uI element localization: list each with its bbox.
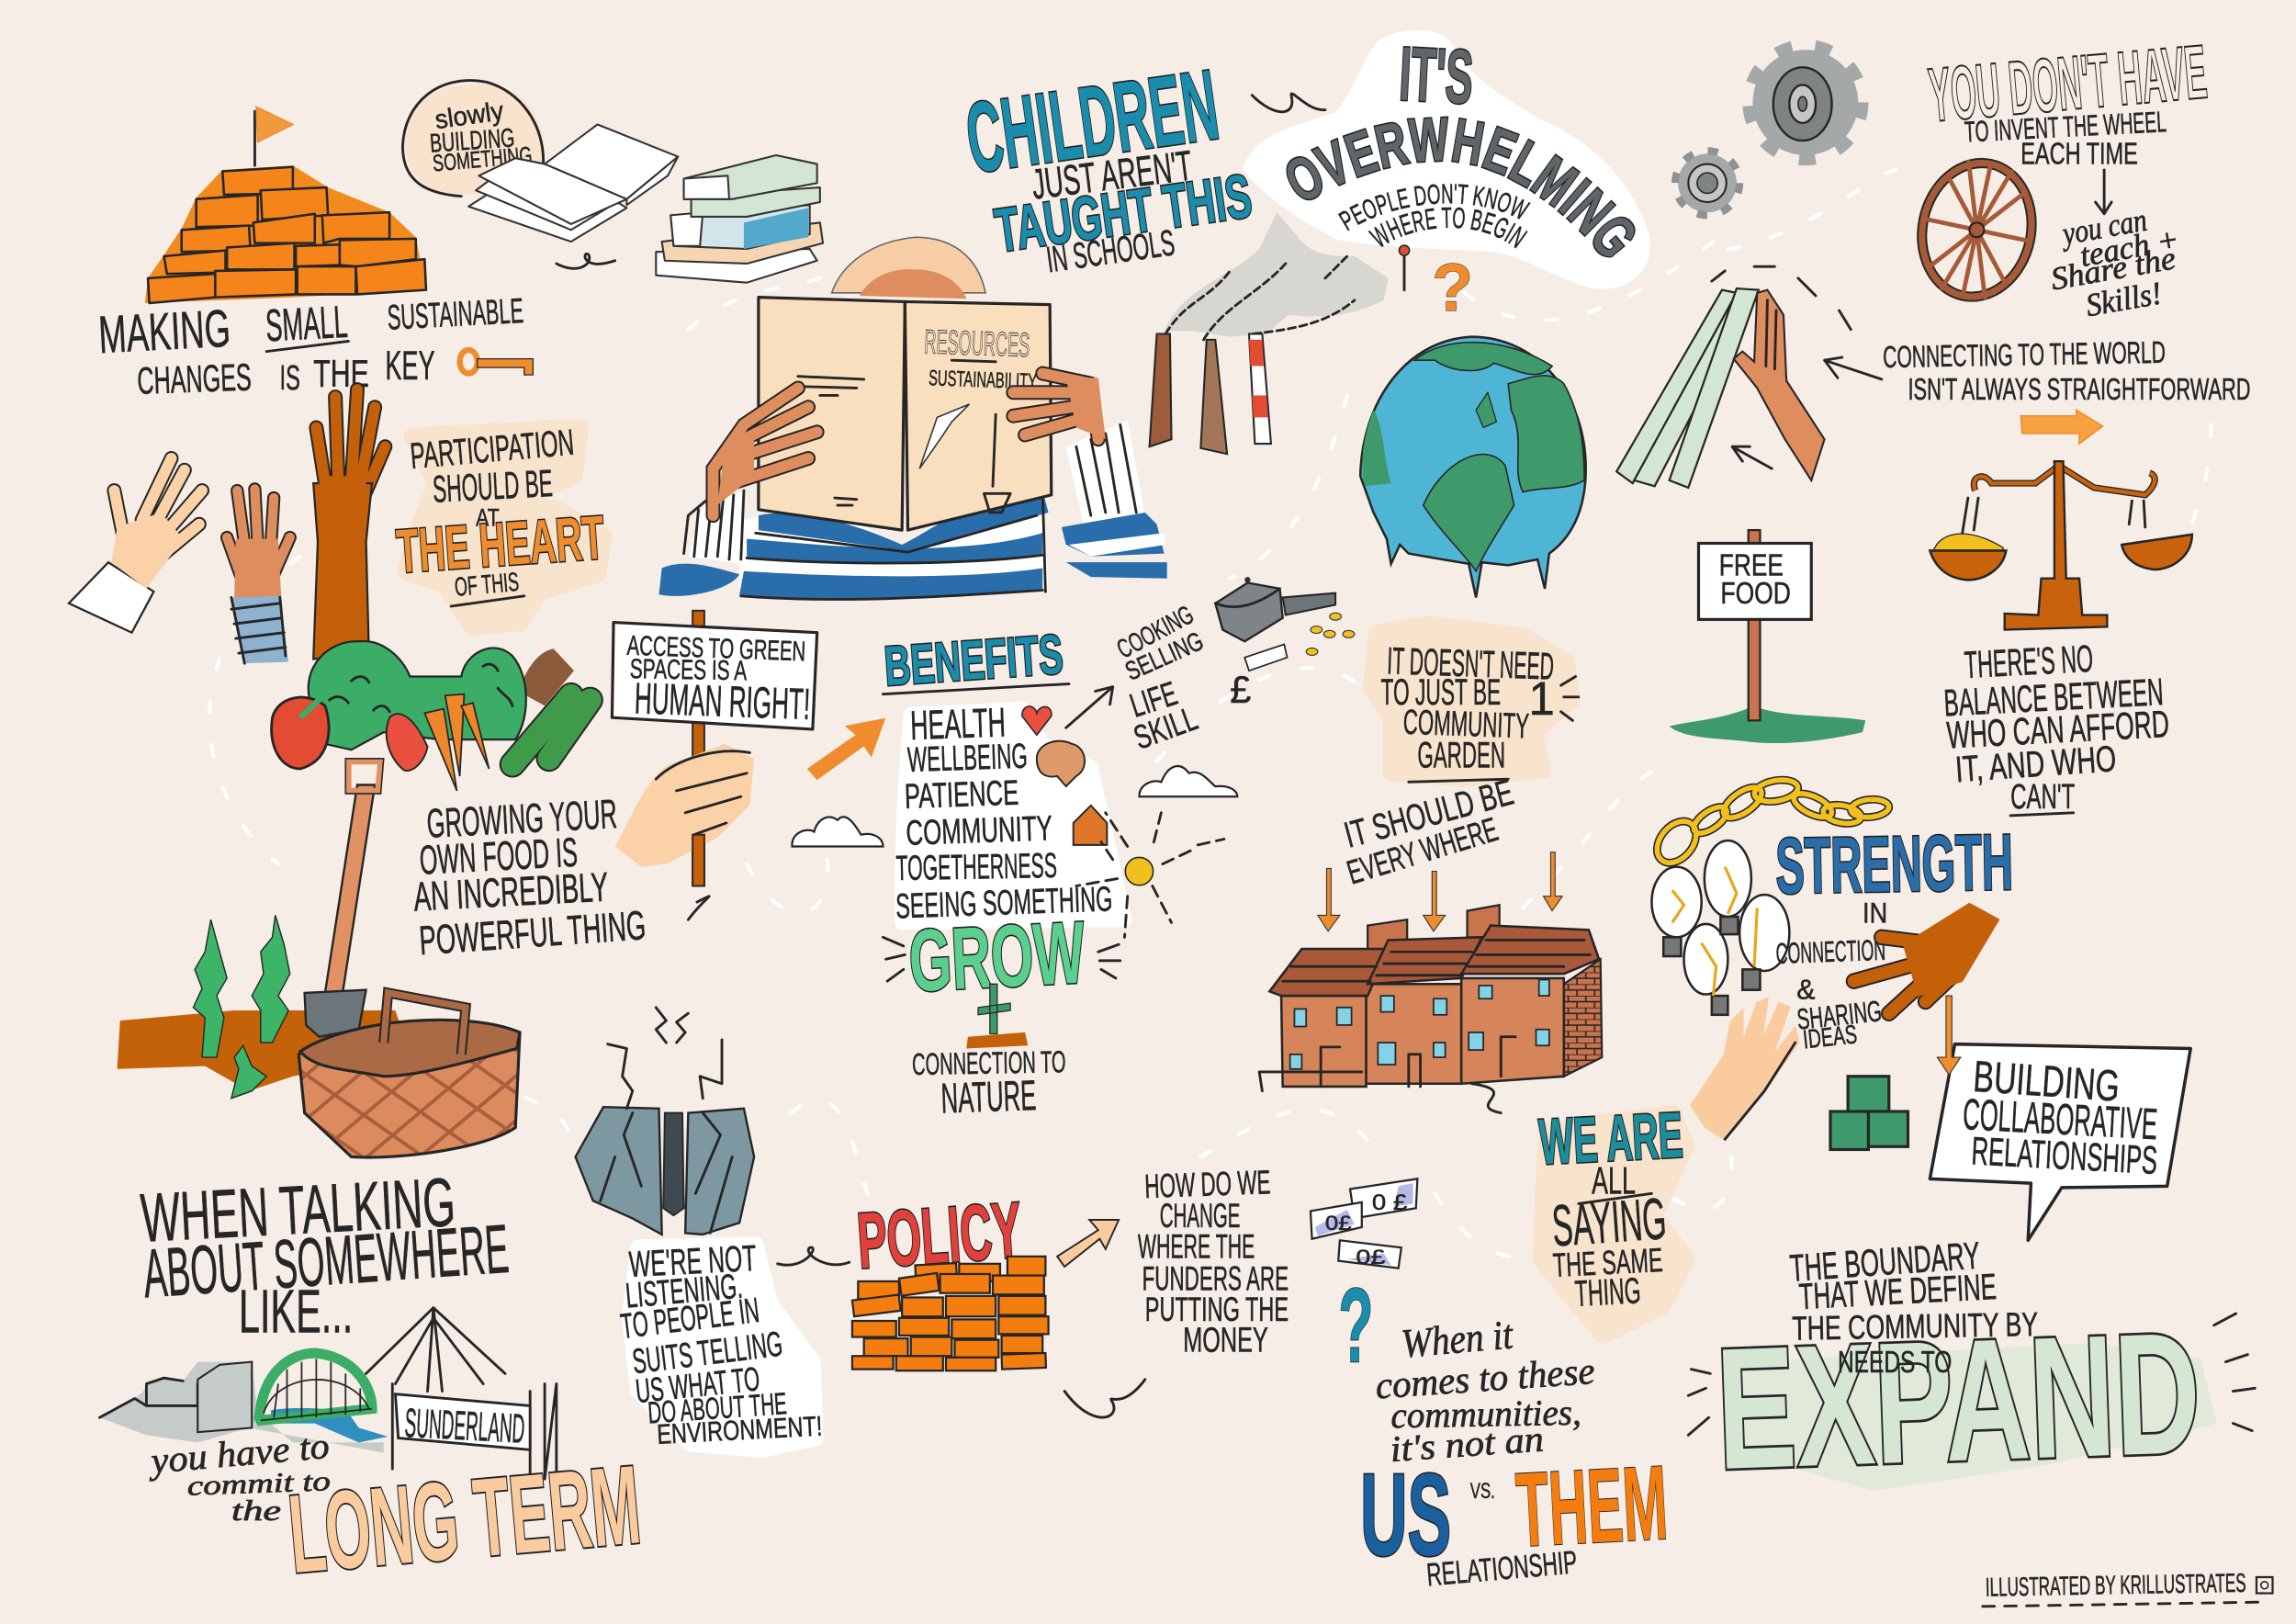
left sleeve	[658, 491, 744, 596]
text: you have to commit to the long term: the	[231, 1494, 281, 1527]
illustration: pile of vegetables	[272, 641, 591, 791]
text: how do we change where the funders: HOW DO WE	[1144, 1163, 1271, 1205]
text: making small sustainable changes is the key: KEY	[385, 344, 435, 389]
text: we are all saying the same thing: WE ARE	[1537, 1099, 1684, 1178]
text: strength in connection and sharing ideas: CONNECTION	[1775, 933, 1886, 970]
icon: brown reaching hand	[1853, 904, 1998, 1013]
right hand	[1013, 374, 1106, 439]
icon: peach reaching hand	[1692, 998, 1798, 1139]
leaf details	[330, 664, 512, 712]
text: the boundary that we define: THE BOUNDARY	[1788, 1234, 1981, 1290]
text: cooking selling life skill	[1112, 600, 1208, 757]
text: when it comes to these communities: communities,	[1390, 1392, 1581, 1436]
squiggle	[778, 1247, 850, 1265]
sign: access to green spaces is a human right: ACCESS TO GREEN	[626, 631, 806, 667]
text: benefits list: TOGETHERNESS	[895, 846, 1057, 888]
text: there's no balance between	[1942, 637, 2170, 817]
text: we are all saying the same thing: SAYING	[1550, 1185, 1669, 1259]
text: we are all saying the same thing	[1537, 1099, 1687, 1336]
text: growing your own food: OWN FOOD IS	[419, 830, 579, 884]
text: growing your own food: AN INCREDIBLY	[412, 865, 609, 920]
heading: when talking about somewhere like: ABOUT SOMEWHERE	[141, 1210, 512, 1312]
text: we are all saying the same thing: THE SAME	[1552, 1241, 1663, 1284]
text: you don't have to invent the wheel: EACH TIME	[2020, 138, 2138, 172]
text: connecting to the world	[1825, 336, 2251, 407]
squiggle	[688, 897, 709, 919]
icon: stack of books	[656, 155, 823, 283]
text: when it comes to these communities: it's not an	[1389, 1417, 1545, 1470]
icon: bank notes: 0£	[1356, 1246, 1386, 1269]
text: there's no balance between: WHO CAN AFFORD	[1946, 702, 2170, 757]
text: children just aren't taught this in schools	[960, 49, 1255, 280]
speech bubble: slowly building something: SOMETHING	[432, 142, 533, 177]
text: grow with plant and connection to nature: GROW	[906, 903, 1087, 1010]
callout: it's overwhelming: WHERE TO BEGIN	[1368, 208, 1528, 248]
icon: light bulbs	[1651, 840, 1789, 1015]
text: participation should be at the heart of this: SHOULD BE	[432, 461, 554, 511]
text: we're not listening to people in suits: WE'RE NOT	[628, 1238, 758, 1285]
striped jumper	[739, 491, 1049, 601]
text: strength in connection and sharing ideas	[1775, 818, 2014, 1054]
icon: small gear	[1675, 151, 1739, 215]
text: growing your own food: POWERFUL THING	[418, 903, 647, 964]
icon: suit jacket	[576, 1008, 754, 1235]
illustration: melting globe	[1360, 337, 1586, 597]
text: the boundary that we define: THE COMMUNITY BY	[1792, 1305, 2038, 1348]
text: children just aren't taught this in schools: TAUGHT THIS	[991, 162, 1255, 265]
text: benefits list: WELLBEING	[906, 737, 1028, 780]
text: participation should be at the heart of this: THE HEART	[394, 503, 607, 586]
text: you can teach and share the skills: teach +	[2077, 221, 2181, 274]
text: you have to commit to the long term	[145, 1425, 645, 1596]
arrow: benefits to life skill	[1066, 687, 1113, 727]
text: we are all saying the same thing: ALL	[1592, 1158, 1636, 1201]
text: us vs them relationship: VS.	[1470, 1479, 1495, 1504]
text: cooking selling life skill: SKILL	[1129, 699, 1202, 757]
illustration: soil with plants	[118, 915, 410, 1099]
text: how do we change where the funders: MONEY	[1183, 1320, 1268, 1359]
pepper stalk	[300, 691, 328, 717]
text: it doesn't need to just be 1 community garden: TO JUST BE	[1381, 672, 1501, 713]
left hand	[713, 388, 817, 515]
text: you can teach and share the skills: Share the	[2048, 240, 2178, 298]
cucumbers	[512, 695, 591, 764]
text: we're not listening to people in suits: SUITS TELLING	[630, 1325, 784, 1382]
text: benefits list: HEALTH	[909, 700, 1007, 749]
icon: coins, note and pound sign	[1230, 613, 1355, 711]
sign: free food: FREE	[1719, 549, 1784, 583]
icon: gold chain	[1649, 777, 1890, 870]
icon: house	[1074, 806, 1107, 845]
text: making small sustainable changes is the key: CHANGES	[137, 355, 252, 402]
squiggle	[557, 254, 615, 268]
text: making small sustainable changes is the key: MAKING	[97, 299, 231, 365]
text: we're not listening to people in suits: US WHAT TO	[634, 1359, 761, 1410]
text: making small sustainable changes is the key: SMALL	[264, 297, 349, 351]
icon: hand holding sign post	[615, 744, 754, 886]
text: we are all saying the same thing: THING	[1574, 1270, 1642, 1314]
speech bubble: slowly building something: slowly	[433, 96, 506, 135]
sign: free food: FOOD	[1720, 577, 1791, 611]
text: you can teach and share the skills	[2048, 202, 2181, 323]
illustration: sunderland skyline and bridge: SUNDERLAND	[404, 1401, 526, 1452]
text: us vs them relationship	[1360, 1444, 1671, 1594]
text: how do we change where the funders	[1138, 1163, 1289, 1359]
arrow: orange down to bubble	[1937, 996, 1961, 1075]
text: cooking selling life skill: LIFE	[1125, 674, 1182, 725]
illustration: factory chimneys with smoke	[1150, 212, 1388, 454]
text: making small sustainable changes is the key	[97, 291, 524, 402]
text: you can teach and share the skills: Skills!	[2083, 275, 2165, 323]
icon: bank notes: 0 £	[1372, 1190, 1407, 1215]
icon: spade	[305, 759, 384, 1037]
text: participation should be at the heart of this	[394, 423, 607, 626]
text: benefits list: PATIENCE	[904, 773, 1019, 817]
text: there's no balance between: THERE'S NO	[1964, 637, 2094, 686]
text: it doesn't need to just be 1 community garden: GARDEN	[1417, 735, 1505, 775]
icon: bank notes	[1311, 1179, 1417, 1269]
icon: grow sun and rays	[1076, 813, 1224, 937]
small red pepper	[387, 714, 428, 771]
text: us vs them relationship: US	[1360, 1450, 1451, 1581]
text: how do we change where the funders: FUNDERS ARE	[1142, 1260, 1289, 1298]
text: you don't have to invent the wheel: TO INVENT THE WHEEL	[1964, 105, 2167, 149]
text: strength in connection and sharing ideas: STRENGTH	[1775, 818, 2014, 910]
icon: tall brown tree-arm hand	[313, 389, 385, 659]
icon: open white book	[468, 125, 678, 242]
callout: it's overwhelming: OVERWHELMING	[1286, 116, 1636, 257]
text: it doesn't need to just be 1 community garden: COMMUNITY	[1402, 703, 1530, 746]
text: strength in connection and sharing ideas: IDEAS	[1802, 1020, 1859, 1054]
text: we're not listening to people in suits	[618, 1238, 823, 1450]
right sleeve	[1062, 421, 1167, 579]
text: we're not listening to people in suits: DO ABOUT THE	[647, 1387, 788, 1431]
text: strength in connection and sharing ideas: SHARING	[1795, 994, 1884, 1036]
sign: access to green spaces is a human right	[612, 611, 817, 886]
icon: brain	[1037, 741, 1085, 786]
heading: when talking about somewhere like	[139, 1163, 512, 1347]
text: the boundary that we define	[1788, 1234, 2038, 1380]
text: you have to commit to the long term: you have to	[145, 1425, 331, 1482]
illustration: terraced houses	[1259, 905, 1602, 1113]
text: children just aren't taught this in schools: IN SCHOOLS	[1044, 222, 1177, 280]
text: us vs them relationship: RELATIONSHIP	[1425, 1544, 1579, 1594]
text: you have to commit to the long term: commit to	[186, 1465, 331, 1502]
text: making small sustainable changes is the key: THE	[313, 352, 369, 395]
text: how do we change where the funders: WHERE THE	[1138, 1227, 1255, 1265]
figure: person reading resources book	[658, 237, 1167, 601]
text: you can teach and share the skills: you can	[2057, 202, 2150, 253]
carrots	[424, 694, 490, 791]
icon: large gear	[1750, 47, 1861, 158]
arrow: orange	[808, 719, 884, 779]
text: you have to commit to the long term: LONG TERM	[284, 1441, 645, 1596]
text: making small sustainable changes is the key: IS	[280, 358, 300, 398]
icon: heart	[1022, 706, 1052, 735]
icon: teal question mark: ?	[1338, 1268, 1374, 1385]
text: participation should be at the heart of this: OF THIS	[454, 568, 520, 603]
icon: hand touching green books	[1616, 266, 1851, 488]
icon: raised white-sleeved hand	[69, 458, 202, 633]
icon: saucepan	[1215, 577, 1335, 641]
arrows: down to houses	[1318, 852, 1562, 931]
icon: coins, note and pound sign: £	[1230, 668, 1251, 711]
text: it should be everywhere	[1340, 773, 1517, 892]
text: the boundary that we define: THAT WE DEFINE	[1798, 1267, 1998, 1317]
open book	[759, 298, 1052, 530]
sign: free food	[1670, 530, 1865, 743]
text: growing your own food: GROWING YOUR	[426, 792, 618, 847]
callout: it's overwhelming: IT'S	[1398, 31, 1475, 120]
text: the boundary that we define: NEEDS TO	[1838, 1346, 1952, 1380]
text: strength in connection and sharing ideas: &	[1796, 975, 1816, 1005]
text: strength in connection and sharing ideas: IN	[1863, 896, 1887, 929]
text: it doesn't need to just be 1 community garden: 1	[1529, 672, 1555, 725]
text: cooking selling life skill: SELLING	[1121, 626, 1208, 687]
callout: it's overwhelming	[1244, 29, 1650, 289]
text: how do we change where the funders: CHANGE	[1160, 1197, 1240, 1235]
speech bubble: slowly building something	[402, 81, 545, 197]
illustration: policy brick wall	[852, 1186, 1049, 1370]
callout: building collaborative relationships	[1930, 1044, 2190, 1240]
book cover text: SUSTAINABILITY	[929, 366, 1038, 394]
squiggle	[1064, 1380, 1145, 1417]
illustration: sunderland skyline and bridge	[99, 1308, 557, 1482]
callout: it's overwhelming: PEOPLE DON'T KNOW	[1337, 184, 1531, 231]
icon: bank notes: 0£	[1325, 1212, 1352, 1235]
illustration: balance scales	[1930, 461, 2192, 630]
book cover text	[798, 322, 1038, 513]
text: it doesn't need to just be 1 community garden: IT DOESN'T NEED	[1387, 638, 1555, 688]
text: we're not listening to people in suits: TO PEOPLE IN	[618, 1291, 761, 1347]
book cover text: RESOURCES	[924, 322, 1030, 364]
brown root veg	[518, 648, 574, 705]
sign: access to green spaces is a human right: SPACES IS A	[629, 654, 748, 686]
red pepper	[272, 697, 329, 769]
icon: raised hand with striped sleeve	[227, 489, 290, 663]
text: it doesn't need to just be 1 community garden	[1370, 624, 1579, 782]
text: grow with plant and connection to nature	[883, 903, 1120, 1122]
text: there's no balance between: IT, AND WHO	[1954, 739, 2118, 790]
text: when it comes to these communities: comes to these	[1374, 1349, 1596, 1406]
text: benefits list: COMMUNITY	[906, 808, 1053, 853]
text: benefits list	[883, 623, 1124, 927]
icon: picnic basket	[298, 993, 520, 1157]
hair and forehead	[832, 237, 985, 299]
speech bubble: slowly building something: BUILDING	[429, 123, 515, 159]
icon: wooden wheel	[1909, 152, 2043, 307]
heading: when talking about somewhere like: LIKE...	[239, 1278, 353, 1347]
illustration: policy brick wall: POLICY	[855, 1186, 1024, 1286]
text: participation should be at the heart of this: PARTICIPATION	[409, 423, 576, 477]
text: when it comes to these communities	[1374, 1311, 1596, 1470]
squiggle	[1252, 94, 1325, 112]
text: it should be everywhere: IT SHOULD BE	[1340, 773, 1517, 856]
icon: orange key	[460, 350, 533, 375]
arrow: peach	[1057, 1220, 1119, 1267]
text: us vs them relationship: THEM	[1514, 1444, 1671, 1569]
text: when it comes to these communities: When it	[1400, 1311, 1515, 1367]
text: participation should be at the heart of this: AT	[476, 502, 500, 531]
text: growing your own food	[412, 792, 647, 964]
icon: question mark with exclamation line: ?	[1432, 250, 1473, 325]
text: we're not listening to people in suits: LISTENING.	[624, 1267, 744, 1316]
icon: question mark with exclamation line	[1399, 245, 1473, 325]
icon: green building blocks	[1830, 1077, 1908, 1149]
text: there's no balance between: CAN'T	[2010, 777, 2075, 817]
callout: building collaborative relationships: RELATIONSHIPS	[1971, 1129, 2158, 1183]
cluster: brick pyramid with flag	[145, 107, 426, 303]
text: benefits list: SEEING SOMETHING	[895, 879, 1113, 927]
text: you don't have to invent the wheel	[1925, 28, 2210, 214]
text: we're not listening to people in suits: ENVIRONMENT!	[657, 1412, 823, 1450]
text: benefits list: BENEFITS	[883, 623, 1065, 697]
callout: building collaborative relationships: BUILDING	[1972, 1053, 2122, 1111]
text: cooking selling life skill: COOKING	[1112, 600, 1199, 665]
arrow: orange right	[2020, 410, 2103, 444]
text: grow with plant and connection to nature: CONNECTION TO	[912, 1045, 1066, 1082]
text: it should be everywhere: EVERY WHERE	[1343, 810, 1503, 892]
heading: when talking about somewhere like: WHEN TALKING	[139, 1163, 457, 1257]
text: children just aren't taught this in schools: CHILDREN	[960, 49, 1224, 194]
text: how do we change where the funders: PUTTING THE	[1145, 1291, 1289, 1328]
text: children just aren't taught this in schools: JUST AREN'T	[1030, 141, 1195, 209]
icons: clouds	[792, 766, 1237, 846]
text: making small sustainable changes is the key: SUSTAINABLE	[387, 291, 524, 338]
sign: access to green spaces is a human right: HUMAN RIGHT!	[634, 674, 811, 729]
text: grow with plant and connection to nature: NATURE	[940, 1071, 1037, 1122]
green leafy greens	[309, 641, 526, 750]
